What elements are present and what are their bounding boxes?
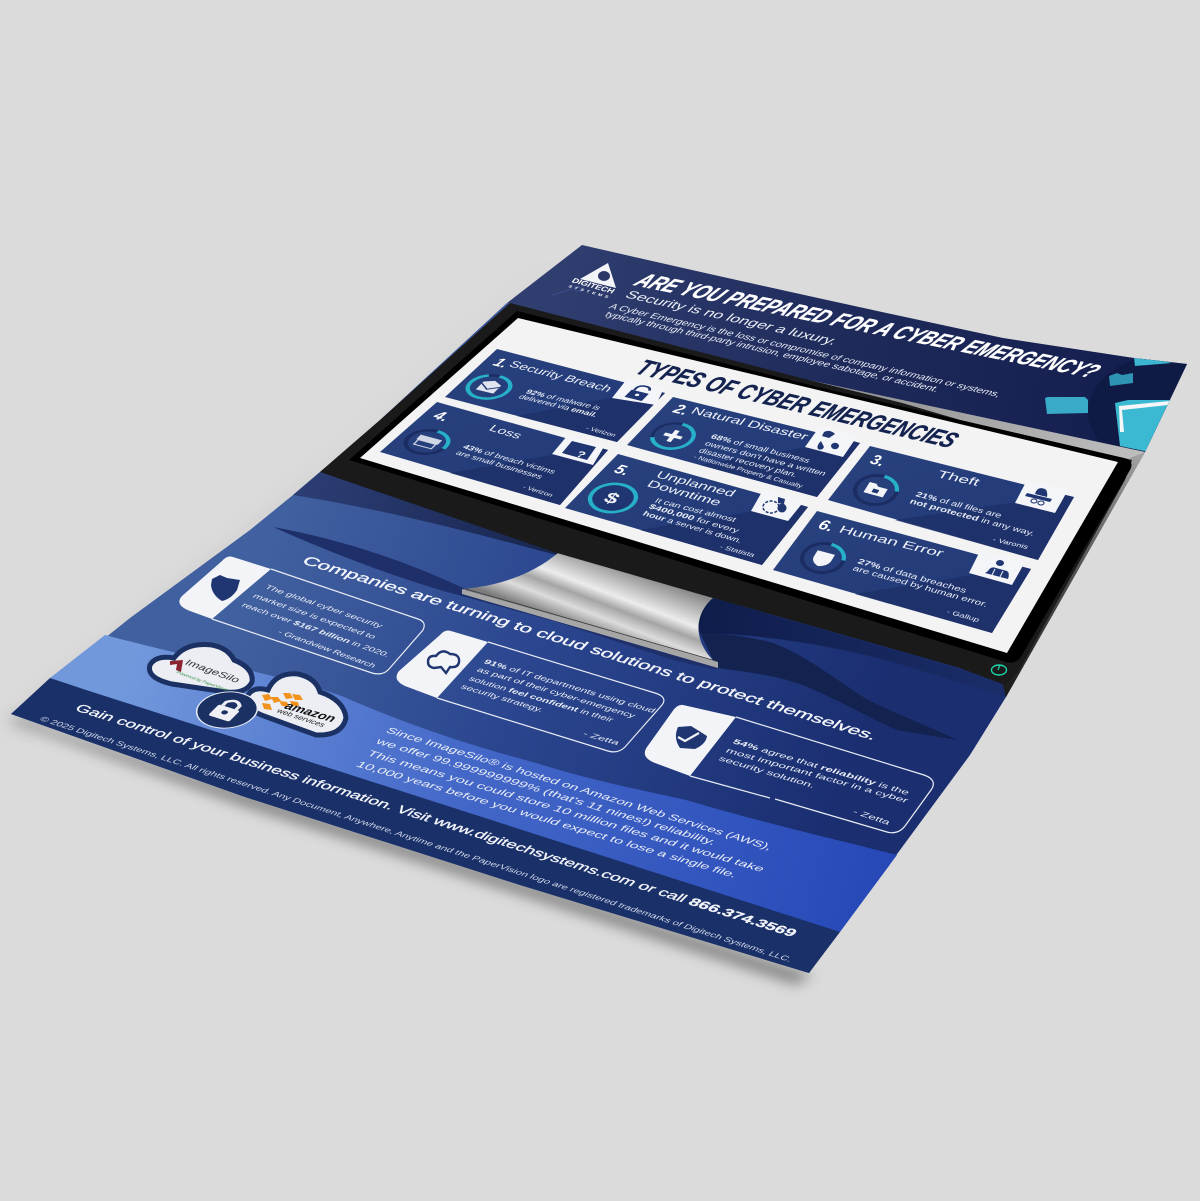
text: security solution. — [717, 754, 818, 789]
text — [669, 401, 828, 490]
text: - Zetta — [851, 807, 894, 827]
text: 54% agree that reliability is the — [731, 737, 912, 796]
text: Loss — [486, 423, 526, 441]
text: Natural Disaster — [688, 405, 812, 442]
text: Security Breach — [506, 359, 615, 394]
text: - Verizon — [521, 484, 555, 498]
text: $400,000 for every — [647, 503, 742, 535]
amazon cloud: amazon — [281, 700, 339, 725]
dark band below bezel — [293, 472, 560, 556]
text: - Verizon — [584, 425, 618, 438]
monitor side edge — [1003, 452, 1145, 697]
intro text: A Cyber Emergency is the loss or compromise of company information or systems, — [606, 302, 1004, 399]
icon: ring 27 — [795, 539, 851, 577]
text — [490, 355, 618, 438]
text: - Nationwide Property & Casualty — [692, 453, 805, 490]
panel: 4 loss — [380, 402, 608, 505]
clouds: imagesilo and amazon logos — [149, 645, 346, 735]
band text: reliability paragraph: 10,000 years before you would expect to lose a single file. — [353, 760, 740, 880]
text: security strategy. — [459, 683, 546, 713]
bright blue band — [50, 635, 897, 932]
text: are caused by human error. — [851, 564, 990, 608]
imagesilo cloud — [149, 645, 252, 693]
text — [717, 737, 912, 827]
icon: box money clock — [751, 490, 805, 521]
icon: padlock circle — [185, 686, 269, 734]
icon: shield — [211, 575, 240, 601]
text: Theft — [935, 468, 983, 488]
panel: 5 unplanned downtime — [565, 454, 808, 565]
text: 6. — [815, 516, 838, 535]
screen — [360, 318, 1118, 653]
text: 5. — [611, 461, 634, 478]
text: not protected in any way. — [908, 497, 1037, 537]
panel: 1 security breach — [445, 349, 665, 442]
text: - Varonis — [991, 536, 1031, 551]
dark swoosh right — [700, 633, 957, 740]
text: 1. — [490, 355, 514, 370]
amazon cloud: web services — [273, 707, 327, 729]
text: owners don't have a written — [703, 440, 828, 477]
text: hour a server is down. — [641, 510, 744, 544]
icon: large dark disc behind folders — [1088, 358, 1187, 452]
icon: folders — [1045, 358, 1172, 452]
text: market size is expected to — [251, 592, 379, 640]
band text: reliability paragraph: we offer 99.999999999% (that's 11 nines!) reliability. — [372, 736, 719, 847]
text: 43% of breach victims — [461, 443, 559, 475]
icon: box padlock — [612, 379, 664, 405]
text: - Statista — [718, 543, 758, 559]
intro text: typically through third-party intrusion, employee sabotage, or accident. — [602, 310, 942, 394]
screen heading: TYPES OF CYBER EMERGENCIES — [630, 356, 964, 453]
icon: box question: ? — [573, 449, 588, 460]
text: Unplanned — [653, 469, 739, 499]
icon: box weather — [805, 426, 858, 457]
gray strip above monitor — [809, 380, 1145, 460]
band text: reliability paragraph: Since ImageSilo® is hosted on Amazon Web Services (AWS), — [383, 726, 775, 852]
icon: box question — [552, 436, 605, 465]
icon: ring dollar — [582, 480, 644, 516]
text: 4. — [429, 408, 454, 424]
panel: IT confidence stat — [397, 630, 664, 752]
text: It can cost almost — [653, 497, 739, 524]
icon: ring dollar: $ — [599, 490, 623, 508]
icon: power button — [992, 665, 1006, 675]
panel: 2 natural disaster — [627, 397, 860, 497]
text: disaster recovery plan. — [697, 447, 799, 478]
text — [429, 408, 559, 498]
text: delivered via email. — [517, 393, 600, 418]
panel: 3 theft — [828, 446, 1074, 560]
panel: 6 human error — [773, 511, 1031, 633]
text: as part of their cyber-emergency — [475, 666, 639, 719]
icon: ring 68 — [645, 420, 701, 452]
text: The global cyber security — [263, 583, 386, 629]
panel: market stat — [179, 556, 424, 674]
text: - Zetta — [581, 730, 623, 746]
header band — [507, 245, 1200, 470]
text — [240, 583, 393, 669]
icon: shield check — [676, 726, 707, 749]
text: 27% of data breaches — [856, 557, 969, 595]
icon: ring 21 — [848, 471, 904, 509]
text — [459, 658, 658, 746]
text: 3. — [867, 451, 889, 470]
panel: reliability stat — [645, 705, 933, 833]
monitor bezel — [320, 303, 1132, 685]
text: Human Error — [837, 523, 947, 559]
text: 68% of small business — [709, 433, 813, 465]
text: reach over $167 billion in 2020. — [240, 601, 393, 658]
icon: ring 92 — [460, 372, 518, 402]
circuit decoration — [552, 289, 572, 295]
footer copyright: © 2025 Digitech Systems, LLC. All rights reserved. Any Document, Anywhere, Anytime and the PaperVision logo are registered trademarks of Digitech Systems, LLC. — [37, 715, 794, 964]
text: - Gallup — [945, 608, 981, 623]
navy area right of stand — [697, 598, 1012, 697]
text: 21% of all files are — [914, 490, 1004, 520]
text — [815, 516, 990, 623]
logo: SYSTEMS — [567, 284, 610, 299]
text: - Grandview Research — [276, 628, 379, 669]
page background — [11, 303, 1145, 973]
soft shadow left of page — [10, 260, 560, 725]
text: Downtime — [644, 478, 725, 508]
text: are small businesses — [454, 449, 546, 480]
amazon cloud — [247, 674, 346, 735]
dark leaf swoosh left — [273, 527, 717, 670]
section heading: Companies are turning to cloud solutions to protect themselves. — [299, 553, 882, 743]
footer call to action: Gain control of your business information. Visit www.digitechsystems.com or call 866.374.3569 — [72, 702, 800, 939]
text: solution feel confident in their — [467, 675, 616, 723]
logo — [567, 263, 617, 299]
icon: box person — [969, 551, 1025, 585]
drop shadow under page — [11, 716, 812, 984]
footer band — [11, 678, 840, 973]
imagesilo cloud: ImageSilo — [182, 658, 243, 685]
icon: ring 43 — [398, 426, 456, 458]
subtitle: Security is no longer a luxury. — [621, 289, 841, 348]
logo: DIGITECH — [570, 277, 617, 295]
imagesilo cloud: Powered by PaperVision — [175, 671, 229, 693]
icon: cloud sync — [428, 651, 459, 673]
text: 92% of malware is — [524, 388, 604, 411]
text: 2. — [669, 401, 693, 418]
text — [867, 451, 1037, 551]
text: most important factor in a cyber — [724, 746, 911, 804]
monitor stand — [462, 553, 718, 668]
text — [611, 461, 758, 559]
band text: reliability paragraph: This means you could store 10 million files and it would take — [364, 749, 767, 874]
icon: box thief — [1015, 480, 1068, 513]
text: 91% of IT departments using cloud — [482, 658, 658, 714]
